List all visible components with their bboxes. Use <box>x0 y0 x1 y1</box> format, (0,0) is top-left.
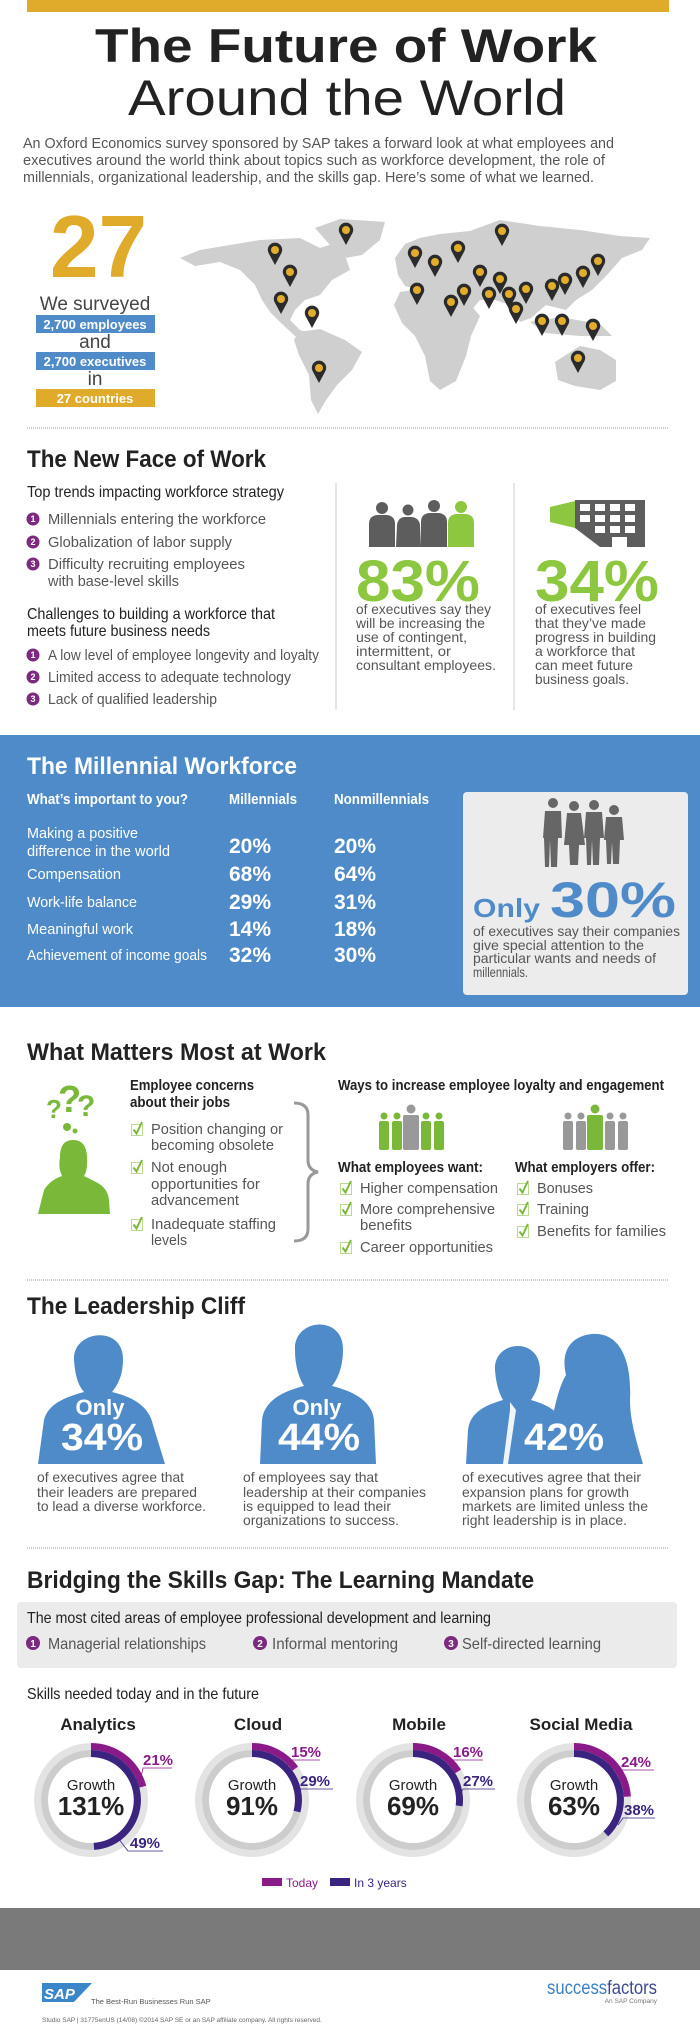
chart: cloud donut: Cloud <box>234 1715 282 1734</box>
panel: leadership 44%: 44% <box>278 1417 360 1459</box>
panel: leadership 34%: of executives agree that <box>37 1469 184 1485</box>
chart: analytics donut: 49% <box>130 1835 160 1852</box>
chart: cloud donut: Growth <box>228 1777 276 1794</box>
panel: trends and challenges: A low level of employee longevity and loyalty <box>48 647 319 664</box>
panel: loyalty and engagement: Training <box>537 1201 589 1218</box>
panel: leadership 44%: Only <box>293 1395 342 1420</box>
panel: employee concerns: levels <box>151 1232 187 1249</box>
title: The Future of Work <box>95 19 598 72</box>
chart: mobile donut: 16% <box>453 1744 483 1761</box>
panel: 34% stat: progress in building <box>535 629 656 645</box>
panel: loyalty and engagement: What employees want: <box>338 1159 483 1176</box>
panel: 34% stat: can meet future <box>535 657 633 673</box>
legend <box>262 1876 407 1890</box>
icon: questioning person <box>38 1079 110 1214</box>
callout: only 30% <box>463 792 688 995</box>
panel: leadership 42%: expansion plans for growth <box>462 1484 629 1500</box>
panel: employee concerns: opportunities for <box>151 1176 260 1193</box>
survey stats: 27 <box>50 197 147 296</box>
chart: analytics donut: 131% <box>58 1791 124 1821</box>
icon: questioning person: ? <box>77 1090 95 1123</box>
panel: leadership 44%: organizations to success. <box>243 1512 399 1528</box>
callout: only 30%: Only <box>473 893 541 923</box>
panel: loyalty and engagement <box>338 1077 666 1256</box>
table: Work-life balance <box>27 894 137 911</box>
intro paragraph: An Oxford Economics survey sponsored by SAP takes a forward look at what employees and <box>23 135 614 152</box>
icon: employer group (gray) <box>563 1104 628 1150</box>
panel: leadership 34% <box>37 1335 206 1514</box>
intro paragraph <box>23 135 614 186</box>
icon: people <box>369 500 474 547</box>
chart: analytics donut: Growth <box>67 1777 115 1794</box>
chart: cloud donut <box>198 1715 333 1854</box>
panel: most cited areas: Self-directed learning <box>462 1636 601 1653</box>
icon: employee group (green) <box>379 1104 444 1150</box>
intro paragraph: millennials, organizational leadership, and the skills gap. Here’s some of what we learned. <box>23 169 594 186</box>
world map with pins <box>180 219 650 414</box>
panel: loyalty and engagement: Benefits for families <box>537 1223 666 1240</box>
icon: standing people <box>543 798 624 867</box>
footer credits: Studio SAP | 31775enUS (14/08) ©2014 SAP SE or an SAP affiliate company. All rights reserved. <box>42 2016 322 2024</box>
panel: 34% stat: 34% <box>535 549 659 614</box>
survey stats: in <box>88 369 102 390</box>
icon: building <box>550 500 645 547</box>
survey stats: and <box>79 332 111 353</box>
chart: social media donut: 63% <box>548 1791 600 1821</box>
panel: 34% stat: a workforce that <box>535 643 635 659</box>
panel: leadership 34%: 34% <box>61 1417 143 1459</box>
table: 64% <box>334 863 376 886</box>
table: 14% <box>229 918 271 941</box>
chart: cloud donut: 15% <box>291 1744 321 1761</box>
legend: Today <box>286 1876 318 1890</box>
panel: 83% stat: consultant employees. <box>356 657 496 673</box>
panel: leadership 42%: markets are limited unless the <box>462 1498 648 1514</box>
panel: leadership 34%: to lead a diverse workforce. <box>37 1498 206 1514</box>
table <box>27 791 429 967</box>
panel: most cited areas <box>17 1602 677 1668</box>
chart: cloud donut: 29% <box>300 1773 330 1790</box>
panel: most cited areas: 2 <box>257 1639 263 1650</box>
heading: What Matters Most at Work: What Matters Most at Work <box>27 1039 327 1066</box>
survey stats: We surveyed <box>40 294 150 315</box>
panel: most cited areas: The most cited areas of employee professional development and learning <box>27 1610 491 1627</box>
panel: 83% stat: use of contingent, <box>356 629 467 645</box>
panel: 83% stat: 83% <box>356 549 480 614</box>
survey stats: 2,700 executives <box>44 354 146 369</box>
panel: trends and challenges: 3 <box>30 694 36 704</box>
chart: social media donut: Social Media <box>530 1715 633 1734</box>
logo: SAP: The Best-Run Businesses Run SAP <box>91 1997 211 2006</box>
table: 68% <box>229 863 271 886</box>
panel: employee concerns: Position changing or <box>151 1121 283 1138</box>
panel: loyalty and engagement: Ways to increase employee loyalty and engagement <box>338 1077 664 1094</box>
panel: trends and challenges: with base-level skills <box>47 573 179 590</box>
legend: In 3 years <box>354 1876 407 1890</box>
panel: trends and challenges <box>26 484 319 708</box>
panel: trends and challenges: 1 <box>30 650 36 660</box>
logo: SAP <box>42 1983 211 2006</box>
panel: 34% stat: that they’ve made <box>535 615 646 631</box>
panel: trends and challenges: Lack of qualified leadership <box>48 691 217 708</box>
callout: only 30%: give special attention to the <box>473 937 644 953</box>
chart: mobile donut <box>360 1715 495 1854</box>
survey stats: 27 countries <box>57 391 133 406</box>
table: What’s important to you? <box>27 791 188 808</box>
title: Around the World <box>128 70 566 126</box>
panel: trends and challenges: Challenges to building a workforce that <box>27 606 275 623</box>
panel: trends and challenges: Difficulty recruiting employees <box>48 556 245 573</box>
table: difference in the world <box>27 843 170 860</box>
callout: only 30%: particular wants and needs of <box>473 950 656 966</box>
panel: trends and challenges: meets future business needs <box>27 623 210 640</box>
panel: loyalty and engagement: Career opportunities <box>360 1239 493 1256</box>
panel: trends and challenges: 2 <box>30 537 36 547</box>
heading: Bridging the Skills Gap: Bridging the Skills Gap: The Learning Mandate <box>27 1567 534 1594</box>
survey stats <box>36 197 155 407</box>
table: Millennials <box>229 791 297 808</box>
panel: 34% stat <box>535 500 659 687</box>
panel: leadership 44%: of employees say that <box>243 1469 378 1485</box>
panel: leadership 44%: is equipped to lead their <box>243 1498 391 1514</box>
chart: mobile donut: Growth <box>389 1777 437 1794</box>
panel: loyalty and engagement: Higher compensation <box>360 1180 498 1197</box>
panel: most cited areas: Managerial relationships <box>48 1636 206 1653</box>
panel: loyalty and engagement: Bonuses <box>537 1180 593 1197</box>
table: 20% <box>229 835 271 858</box>
table: 30% <box>334 944 376 967</box>
table: 31% <box>334 891 376 914</box>
chart: social media donut: 38% <box>624 1802 654 1819</box>
chart: analytics donut: Analytics <box>60 1715 136 1734</box>
callout: only 30%: 30% <box>550 872 676 928</box>
panel: leadership 34%: their leaders are prepared <box>37 1484 197 1500</box>
gray footer band <box>0 1908 700 1970</box>
callout: only 30%: millennials. <box>473 964 528 980</box>
logo: successfactors: An SAP Company <box>605 1998 658 2005</box>
table: 32% <box>229 944 271 967</box>
panel: 83% stat: will be increasing the <box>355 615 485 631</box>
heading: The Millennial Workforce <box>27 753 297 780</box>
panel: trends and challenges: 3 <box>30 559 36 569</box>
panel: most cited areas: 1 <box>30 1639 36 1650</box>
chart: social media donut: 24% <box>621 1754 651 1771</box>
panel: 83% stat <box>355 500 496 673</box>
brace <box>294 1103 318 1241</box>
panel: leadership 34%: Only <box>76 1395 125 1420</box>
panel: millennial workforce <box>0 735 700 1007</box>
panel: loyalty and engagement: More comprehensive <box>360 1201 495 1218</box>
heading: The Leadership Cliff: The Leadership Cliff <box>27 1293 246 1320</box>
panel: employee concerns <box>130 1077 283 1249</box>
icon: questioning person: ? <box>58 1079 81 1121</box>
callout: only 30%: of executives say their companies <box>473 923 680 939</box>
table: Compensation <box>27 866 121 883</box>
chart: mobile donut: 69% <box>387 1791 439 1821</box>
table: Nonmillennials <box>334 791 429 808</box>
chart: cloud donut: 91% <box>226 1791 278 1821</box>
logo: SAP: SAP <box>44 1986 76 2003</box>
panel: employee concerns: Not enough <box>151 1159 227 1176</box>
panel: trends and challenges: Globalization of labor supply <box>48 534 232 551</box>
panel: loyalty and engagement: benefits <box>360 1217 412 1234</box>
chart: social media donut: Growth <box>550 1777 598 1794</box>
panel: employee concerns: Inadequate staffing <box>151 1216 276 1233</box>
heading: The New Face of Work: The New Face of Work <box>27 446 267 473</box>
panel: trends and challenges: 2 <box>30 672 36 682</box>
panel: most cited areas: Informal mentoring <box>272 1636 398 1653</box>
icon: questioning person: ? <box>46 1094 62 1124</box>
panel: 34% stat: of executives feel <box>535 601 641 617</box>
panel: trends and challenges: Millennials entering the workforce <box>48 511 266 528</box>
panel: leadership 42% <box>462 1334 648 1528</box>
panel: leadership 44%: leadership at their companies <box>243 1484 426 1500</box>
table: Meaningful work <box>27 921 133 938</box>
panel: leadership 42%: of executives agree that their <box>462 1469 641 1485</box>
panel: 34% stat: business goals. <box>535 671 629 687</box>
panel: leadership 44% <box>243 1324 426 1528</box>
panel: most cited areas: 3 <box>448 1639 454 1650</box>
table: 20% <box>334 835 376 858</box>
chart: analytics donut: 21% <box>143 1752 173 1769</box>
chart: analytics donut <box>38 1715 173 1854</box>
panel: employee concerns: advancement <box>151 1192 240 1209</box>
subheading: skills needed: Skills needed today and in the future <box>27 1686 259 1703</box>
table: 29% <box>229 891 271 914</box>
title <box>95 19 598 126</box>
chart: mobile donut: 27% <box>463 1773 493 1790</box>
chart: social media donut <box>520 1715 655 1854</box>
table: Making a positive <box>27 825 138 842</box>
table: 18% <box>334 918 376 941</box>
panel: employee concerns: about their jobs <box>130 1094 230 1111</box>
intro paragraph: executives around the world think about topics such as workforce development, the role of <box>23 152 606 169</box>
panel: loyalty and engagement: What employers offer: <box>515 1159 655 1176</box>
logo: successfactors: successfactors <box>547 1978 657 1999</box>
panel: trends and challenges: Limited access to adequate technology <box>48 669 291 686</box>
panel: employee concerns: Employee concerns <box>130 1077 254 1094</box>
panel: trends and challenges: 1 <box>30 514 36 524</box>
panel: 83% stat: of executives say they <box>356 601 491 617</box>
survey stats: 2,700 employees <box>43 317 147 332</box>
panel: employee concerns: becoming obsolete <box>151 1137 274 1154</box>
panel: 83% stat: intermittent, or <box>356 643 451 659</box>
top gold bar <box>27 0 669 12</box>
panel: leadership 42%: 42% <box>524 1417 604 1459</box>
panel: trends and challenges: Top trends impacting workforce strategy <box>27 484 284 501</box>
panel: leadership 42%: right leadership is in place. <box>462 1512 627 1528</box>
chart: mobile donut: Mobile <box>392 1715 446 1734</box>
table: Achievement of income goals <box>27 947 207 964</box>
